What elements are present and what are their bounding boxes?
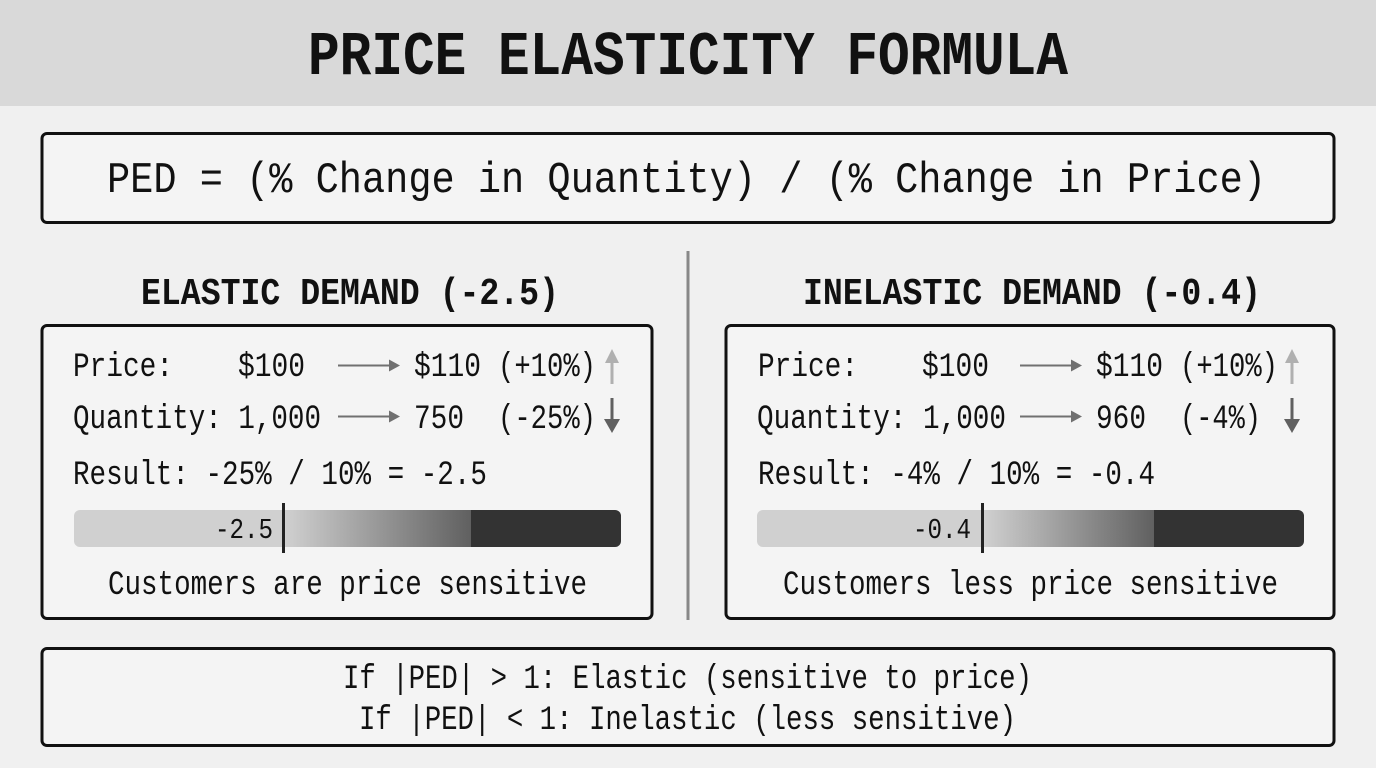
title: PRICE ELASTICITY FORMULA	[308, 22, 1069, 93]
quantity row: 750	[414, 401, 464, 439]
panel: formula	[42, 134, 1334, 222]
panel: rule summary: If |PED| > 1: Elastic (sensitive to price)	[343, 661, 1032, 699]
icon: down arrow	[604, 398, 620, 433]
panel: inelastic demand	[726, 326, 1334, 618]
heading: inelastic demand: INELASTIC DEMAND (-0.4)	[803, 273, 1261, 316]
result: Result: -4% / 10% = -0.4	[758, 457, 1155, 495]
result: Result: -25% / 10% = -2.5	[73, 457, 487, 495]
icon: down arrow	[1284, 398, 1300, 433]
quantity row	[757, 401, 1261, 439]
quantity row: Quantity: 1,000	[757, 401, 1006, 439]
quantity row: (-4%)	[1180, 401, 1261, 439]
icon: up arrow	[605, 349, 619, 384]
price row: Price:	[758, 349, 858, 387]
divider	[686, 251, 690, 620]
heading: elastic demand: ELASTIC DEMAND (-2.5)	[141, 273, 559, 316]
title	[0, 0, 1376, 106]
price row	[758, 349, 1278, 387]
price row	[73, 349, 596, 387]
price row: $100	[922, 349, 989, 387]
gauge bar	[757, 503, 1304, 553]
price row: (+10%)	[498, 349, 596, 387]
panel: rule summary: If |PED| < 1: Inelastic (less sensitive)	[359, 702, 1016, 740]
gauge bar: -0.4	[913, 514, 971, 547]
price row: $100	[238, 349, 305, 387]
price row: $110	[414, 349, 481, 387]
price row: (+10%)	[1180, 349, 1278, 387]
panel: elastic demand	[42, 326, 652, 618]
gauge bar: -2.5	[215, 514, 273, 547]
icon: up arrow	[1285, 349, 1299, 384]
caption: Customers are price sensitive	[108, 567, 587, 605]
quantity row	[73, 401, 596, 439]
quantity row: 960	[1096, 401, 1146, 439]
panel: rule summary	[42, 648, 1334, 746]
quantity row: (-25%)	[498, 401, 596, 439]
quantity row: Quantity: 1,000	[73, 401, 321, 439]
price row: Price:	[73, 349, 173, 387]
gauge bar	[74, 503, 621, 553]
price row: $110	[1096, 349, 1163, 387]
